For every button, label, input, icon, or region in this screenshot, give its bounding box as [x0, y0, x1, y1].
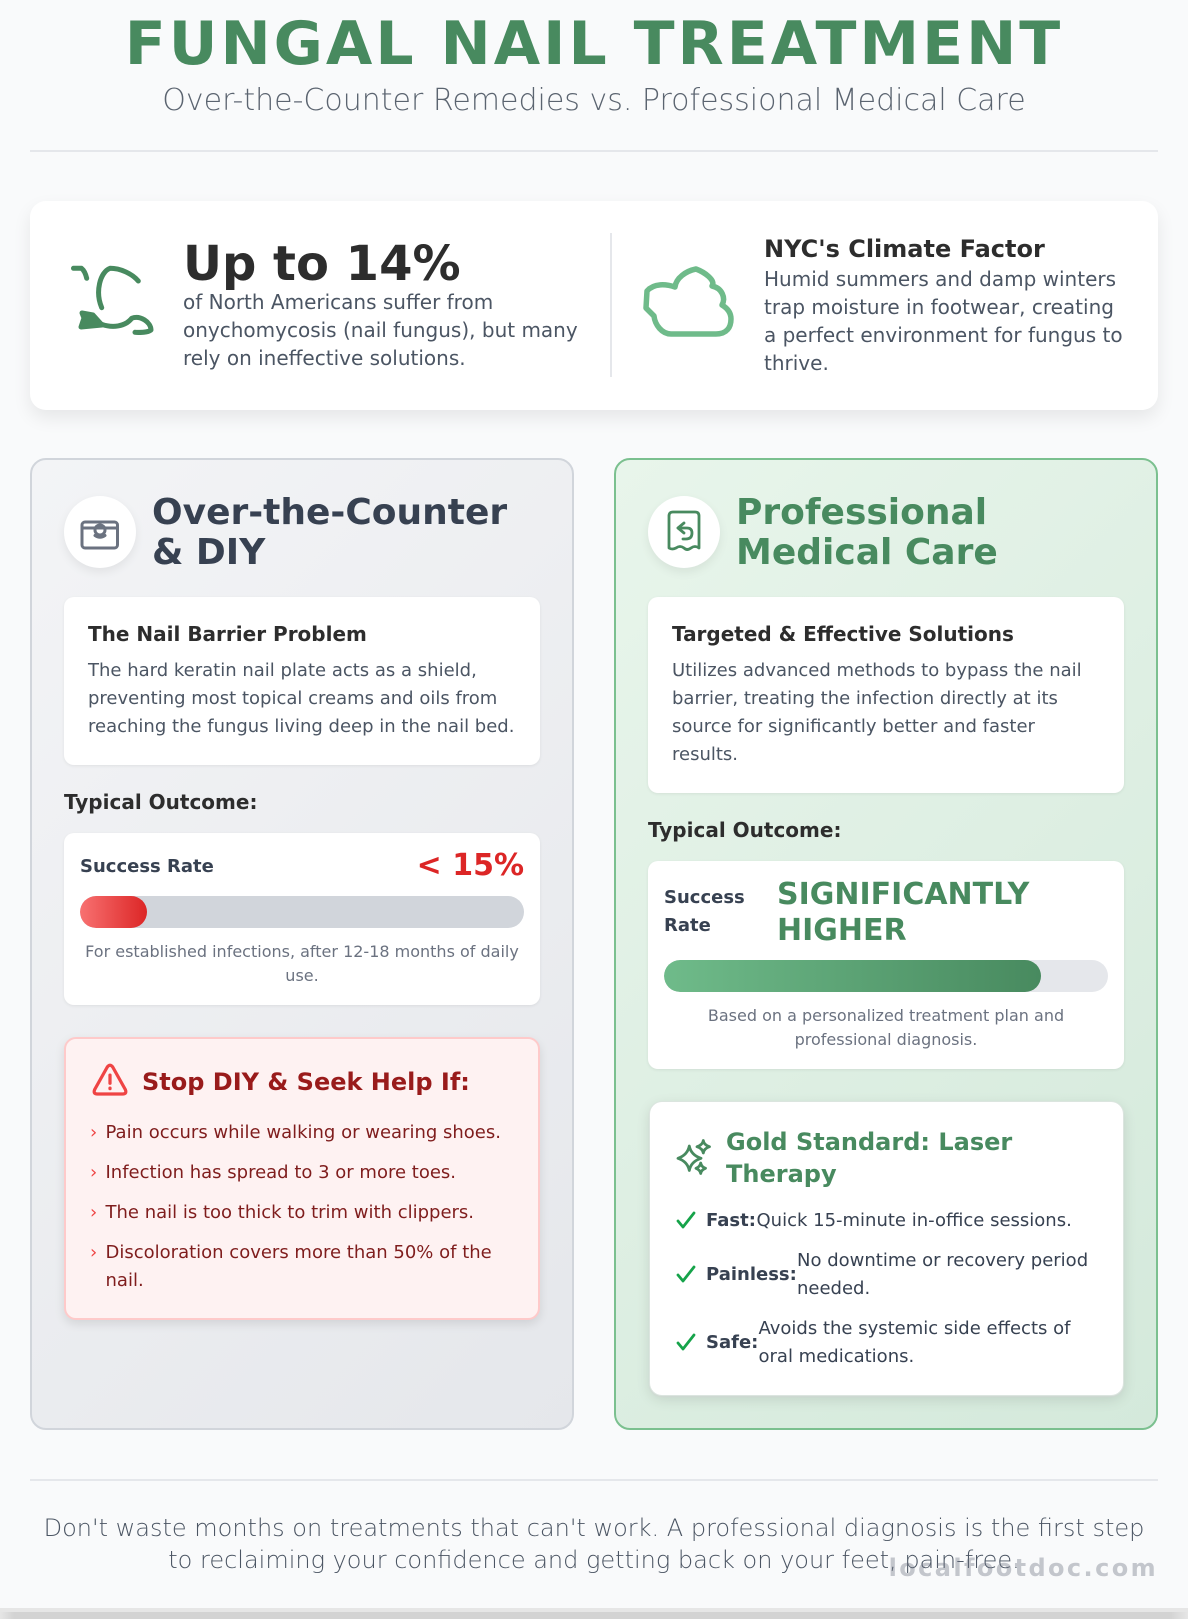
check item: safe: oral medications.	[758, 1346, 914, 1367]
icon: check	[676, 1212, 696, 1228]
note: For established infections, after 12-18 months of daily	[85, 942, 519, 961]
progress bar	[80, 896, 524, 928]
barrier text: reaching the fungus living deep in the nail bed.	[88, 716, 514, 737]
icon: sparkles	[676, 1139, 711, 1175]
check item: safe	[676, 1318, 1071, 1367]
card: nail barrier problem	[64, 597, 540, 765]
climate description: trap moisture in footwear, creating	[764, 295, 1114, 319]
success value: SIGNIFICANTLY	[777, 877, 1029, 912]
icon: warning triangle	[92, 1064, 128, 1096]
panel: professional care	[614, 458, 1158, 1430]
targeted text: barrier, treating the infection directly at its	[672, 688, 1058, 709]
card: professional success rate	[648, 861, 1124, 1069]
note: Based on a personalized treatment plan and	[708, 1006, 1064, 1025]
climate description: a perfect environment for fungus to	[764, 323, 1123, 347]
barrier text	[88, 660, 514, 737]
note	[708, 1006, 1064, 1049]
label: typical outcome: Typical Outcome:	[648, 818, 841, 842]
success value: HIGHER	[777, 913, 907, 948]
warning list: ›	[90, 1162, 97, 1183]
check item: painless: needed.	[797, 1278, 870, 1299]
targeted text: results.	[672, 744, 738, 765]
barrier heading: The Nail Barrier Problem	[88, 622, 367, 646]
targeted heading: Targeted & Effective Solutions	[672, 622, 1014, 646]
card: targeted solutions	[648, 597, 1124, 793]
heading: professional: Professional	[736, 492, 987, 533]
card: OTC success rate	[64, 833, 540, 1005]
icon: cloud	[643, 266, 734, 337]
warning list: Discoloration covers more than 50% of the	[106, 1242, 492, 1263]
heading: professional: Medical Care	[736, 532, 998, 573]
success value: < 15%	[417, 848, 524, 883]
warning list: ›	[90, 1122, 97, 1143]
success label: Rate	[664, 915, 711, 936]
heading: OTC: Over-the-Counter	[152, 492, 507, 533]
icon: check	[676, 1334, 696, 1350]
heading: OTC	[152, 492, 508, 573]
warning list: Pain occurs while walking or wearing shoes.	[106, 1122, 501, 1143]
success label	[664, 887, 745, 936]
footer message: to reclaiming your confidence and getting back on your feet, pain-free.	[168, 1546, 1020, 1574]
label: typical outcome: Typical Outcome:	[64, 790, 257, 814]
panel: statistics banner	[30, 201, 1158, 410]
climate heading: NYC's Climate Factor	[764, 235, 1045, 263]
warning list: nail.	[106, 1270, 144, 1291]
note: professional diagnosis.	[795, 1030, 977, 1049]
check item: painless: Painless:	[706, 1264, 797, 1285]
barrier text: preventing most topical creams and oils from	[88, 688, 497, 709]
climate description: thrive.	[764, 351, 829, 375]
heading: OTC: & DIY	[152, 532, 265, 573]
laser heading: Therapy	[726, 1160, 837, 1188]
climate description: Humid summers and damp winters	[764, 267, 1116, 291]
targeted text: source for significantly better and faster	[672, 716, 1035, 737]
progress bar	[664, 960, 1108, 992]
warning list: ›	[90, 1242, 97, 1263]
icon: wallet circle	[64, 496, 136, 568]
warning list: Infection has spread to 3 or more toes.	[106, 1162, 456, 1183]
warning list: The nail is too thick to trim with clippers.	[106, 1202, 474, 1223]
warning heading: Stop DIY & Seek Help If:	[142, 1068, 470, 1096]
heading: professional	[736, 492, 998, 573]
title: FUNGAL NAIL TREATMENT	[125, 9, 1063, 79]
panel: warning	[64, 1037, 540, 1320]
barrier text: The hard keratin nail plate acts as a shield,	[88, 660, 477, 681]
footer message: Don't waste months on treatments that can't work. A professional diagnosis is the first step	[44, 1514, 1144, 1542]
stat headline: Up to 14%	[183, 236, 461, 292]
success value	[777, 877, 1030, 948]
targeted text: Utilizes advanced methods to bypass the nail	[672, 660, 1082, 681]
subtitle: Over-the-Counter Remedies vs. Professional Medical Care	[162, 83, 1026, 118]
footer message	[44, 1514, 1144, 1574]
laser heading	[726, 1128, 1012, 1188]
icon: check	[676, 1266, 696, 1282]
check item: painless	[676, 1250, 1088, 1299]
check item: fast: Fast:	[706, 1210, 756, 1231]
check item: painless: No downtime or recovery period	[797, 1250, 1088, 1271]
panel: over-the-counter	[30, 458, 574, 1430]
icon: receipt circle	[648, 496, 720, 568]
stat description: of North Americans suffer from	[183, 290, 493, 314]
climate description	[764, 267, 1123, 375]
note: use.	[285, 966, 319, 985]
stat description	[183, 290, 578, 370]
check item: fast: Quick 15-minute in-office sessions.	[756, 1210, 1072, 1231]
card: laser therapy	[650, 1102, 1123, 1395]
watermark: localfootdoc.com	[889, 1554, 1158, 1582]
note	[85, 942, 519, 985]
warning list	[90, 1122, 501, 1291]
check item: safe: Safe:	[706, 1332, 758, 1353]
warning list: ›	[90, 1202, 97, 1223]
icon: foot	[71, 266, 154, 335]
success label: Success	[664, 887, 745, 908]
check item: safe: Avoids the systemic side effects of	[758, 1318, 1070, 1339]
success label: Success Rate	[80, 856, 214, 877]
laser heading: Gold Standard: Laser	[726, 1128, 1012, 1156]
targeted text	[672, 660, 1082, 765]
stat description: onychomycosis (nail fungus), but many	[183, 318, 578, 342]
stat description: rely on ineffective solutions.	[183, 346, 466, 370]
